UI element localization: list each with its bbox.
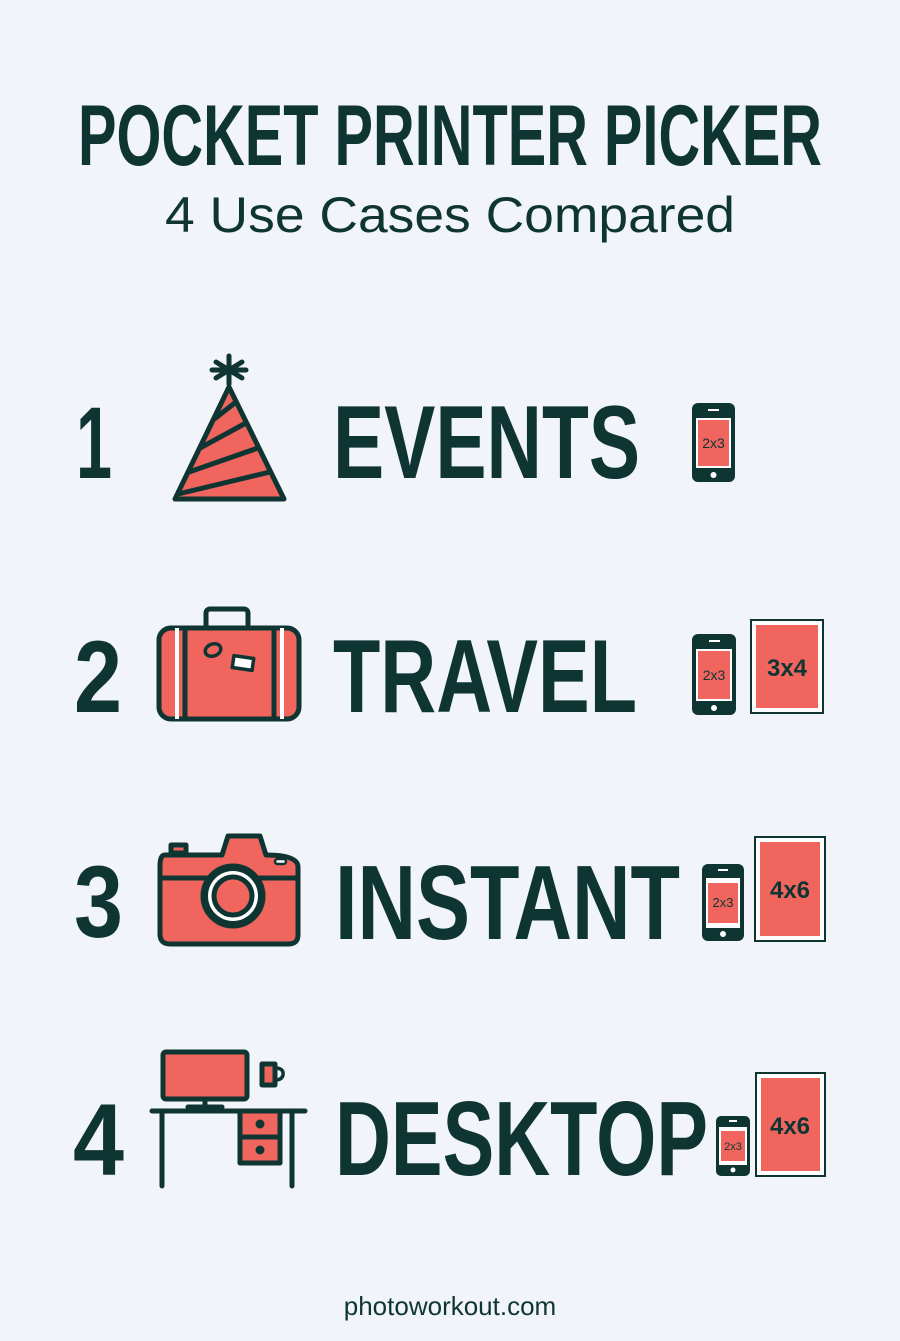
- icon: print 4x6: 4x6: [770, 877, 810, 904]
- row 4: desktop: [73, 1052, 826, 1198]
- icon: phone 2x3: [692, 403, 735, 482]
- label: EVENTS: EVENTS: [333, 385, 640, 501]
- icon: phone 2x3: [692, 634, 736, 715]
- icon: phone 2x3: [716, 1116, 750, 1176]
- icon: print 4x6: 4x6: [770, 1113, 810, 1140]
- number 2: 2: [74, 620, 122, 734]
- number 3: 3: [74, 845, 123, 959]
- icon: camera: [160, 836, 298, 944]
- icon: print 4x6: [755, 1072, 826, 1177]
- number 4: 4: [73, 1083, 124, 1197]
- row 2: travel: [74, 609, 824, 735]
- icon: phone 2x3: 2x3: [724, 1141, 742, 1153]
- number 1: 1: [76, 386, 112, 500]
- icon: suitcase: [159, 609, 299, 719]
- icon: party hat: [175, 356, 284, 499]
- row 1: events: [76, 356, 735, 501]
- icon: print 3x4: [750, 619, 824, 714]
- subtitle: 4 Use Cases Compared: [165, 187, 735, 243]
- footer: photoworkout.com: [344, 1291, 556, 1321]
- label: INSTANT: INSTANT: [335, 844, 680, 962]
- icon: desk with monitor: [152, 1052, 305, 1186]
- row 3: instant: [74, 836, 826, 962]
- icon: print 3x4: 3x4: [767, 655, 808, 682]
- icon: phone 2x3: 2x3: [702, 435, 725, 451]
- icon: phone 2x3: 2x3: [713, 895, 733, 910]
- icon: phone 2x3: [702, 864, 744, 941]
- label: TRAVEL: TRAVEL: [333, 619, 637, 735]
- icon: print 4x6: [754, 836, 826, 942]
- icon: phone 2x3: 2x3: [703, 667, 725, 683]
- label: DESKTOP: DESKTOP: [335, 1080, 708, 1198]
